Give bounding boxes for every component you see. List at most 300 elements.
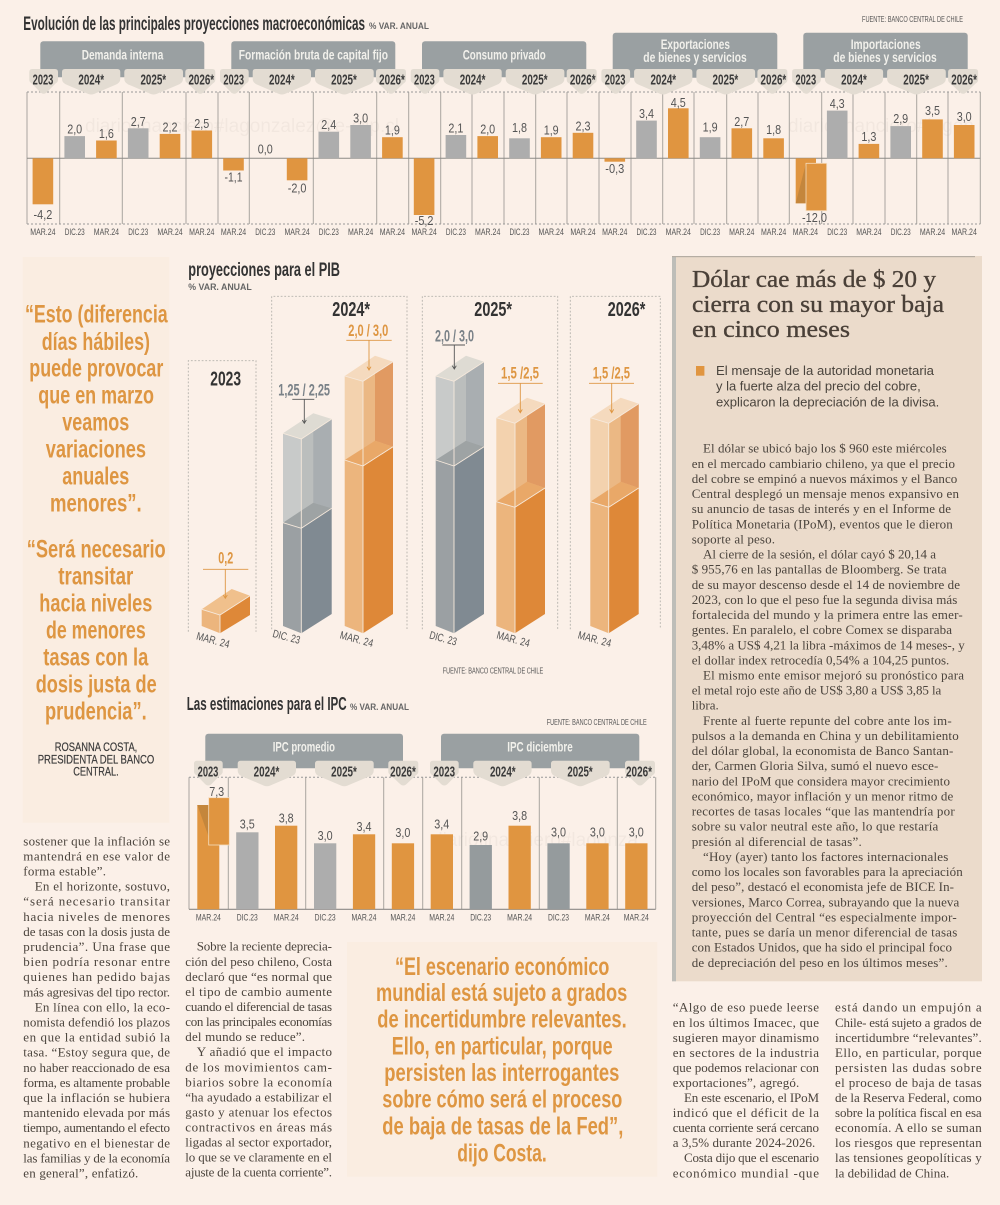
bars: IPC diciembre: 3,0 [551,825,566,840]
text block: fourth column article: incertidumbre “relevantes”. [835,1030,982,1045]
year labels: 2025* [331,765,357,781]
quote: diferencia días hábiles: anuales [62,462,129,490]
header: IPC promedio: IPC promedio [273,738,335,754]
bar: 2026 MAR.24 1,5 / 2,5: MAR. 24 [577,630,612,650]
article body text: del dólar global, la economista de Banco Santan- [692,743,953,758]
bar: 2025 MAR.24 1,5 / 2,5: 1,5 /2,5 [501,363,539,382]
group: Importaciones de bienes y servicios: 2025* [903,72,929,88]
text block: third column article: indicó que el déficit de la [673,1105,819,1120]
quote: diferencia días hábiles: menores”. [50,489,142,517]
group: Consumo privado: MAR.24 [475,227,500,238]
group: Consumo privado: Consumo privado [463,46,546,62]
bar: 2024 DIC.23 1,25 / 2,25: 1,25 / 2,25 [278,380,330,399]
text block: left column article: tiempo, aumentando el efecto [23,1120,170,1135]
group: Formación bruta de capital fijo: 3,0 [353,110,368,126]
chart: GDP 3D bars: 2026* [608,299,645,321]
article body text: sobre su valor neutral este año, lo que restaría [692,819,939,834]
article body text: proyección del Central “es especialmente impor- [692,909,957,924]
heading: macroeconomic projections: % VAR. ANUAL [369,21,429,31]
group: Exportaciones de bienes y servicios: 1,8 [766,122,781,137]
quote: diferencia días hábiles [25,301,168,517]
text block: left column article: las familias y de la economía [23,1150,170,1165]
group: Exportaciones de bienes y servicios: MAR.24 [666,227,691,238]
article body text: der, Carmen Gloria Silva, sumó el nuevo esce- [692,758,938,773]
group: Importaciones de bienes y servicios: MAR.24 [952,227,977,238]
group: Exportaciones de bienes y servicios: 2,7 [734,114,749,129]
text block: left column article: En el horizonte, sostuvo, [35,879,170,894]
bars: IPC diciembre: MAR.24 [429,913,454,924]
text block: left column article: forma estable”. [23,864,106,878]
bar: 2025 DIC.23 2,0 / 3,0: 2,0 / 3,0 [435,326,474,345]
group: Exportaciones de bienes y servicios: MAR.24 [761,227,786,238]
group: Exportaciones de bienes y servicios: de bienes y servicios [643,49,747,65]
article headline: en cinco meses [692,317,850,343]
text block: third column article: En este escenario, el IPoM [684,1090,819,1105]
text block: left column article: hacia niveles de menores [23,909,170,924]
heading: macroeconomic projections: Evolución de las principales proyecciones macroeconómicas [23,14,365,35]
text block: fourth column article: el proceso de baja de tasas [835,1075,982,1090]
group: Exportaciones de bienes y servicios: -0,3 [605,161,624,176]
group: Formación bruta de capital fijo: 2025* [331,72,357,88]
year labels: 2023 [433,765,455,781]
text block: second column article: el tipo de cambio aumente [185,984,332,999]
group: Consumo privado: 2026* [570,72,596,88]
group: Demanda interna: 2,0 [67,122,82,137]
quote: diferencia días hábiles: variaciones [46,435,146,463]
quote: diferencia días hábiles: “Esto (diferencia [25,301,168,329]
article body text: gentes. En paralelo, el cobre Comex se disparaba [692,622,952,637]
group: Consumo privado: DIC.23 [510,227,530,238]
article body text: versiones, Marco Correa, subrayando que la nueva [692,894,960,909]
group: Importaciones de bienes y servicios: DIC.23 [891,227,911,238]
text block: second column article: gasto y atenuar los efectos [185,1104,332,1120]
attribution: Rosanna Costa: ROSANNA COSTA, [55,740,137,754]
group: Formación bruta de capital fijo [220,41,406,238]
text block: third column article: que podemos relacionar con [673,1060,820,1075]
bar: 2023 MAR.24 0,2: 0,2 [218,548,233,567]
article body text: soporte al peso. [692,531,775,546]
article body text: en el mercado cambiario chileno, ya que el precio [692,456,955,471]
quote: será necesario transitar: de menores [46,617,146,645]
bar: 2023 MAR.24 0,2: MAR. 24 [195,631,231,651]
group: Exportaciones de bienes y servicios: DIC.23 [700,227,720,238]
source note: GDP chart: FUENTE: BANCO CENTRAL DE CHILE [443,666,543,675]
group: Importaciones de bienes y servicios: Importaciones [851,36,921,52]
year labels: 2026* [390,765,416,781]
group: Consumo privado: 2,1 [448,120,463,136]
article body text: nario del IPoM que considera mayor crecimiento [692,773,950,788]
group: Exportaciones de bienes y servicios: MAR.24 [729,227,754,238]
bar: 2025 DIC.23 2,0 / 3,0: DIC. 23 [428,630,458,648]
group: Formación bruta de capital fijo: MAR.24 [221,227,246,238]
article body text: libra. [692,698,719,713]
text block: fourth column article [835,1000,982,1180]
group: Consumo privado: MAR.24 [570,227,596,238]
text block: fourth column article: Ello, en particular, porque [835,1045,982,1060]
panel: pull quote escenario económico: de baja de tasas de la Fed”, [382,1112,623,1140]
header: IPC promedio [205,734,403,768]
heading: GDP projections: proyecciones para el PIB [188,260,340,281]
bar: 2025 DIC.23 2,0 / 3,0 [428,326,484,648]
group: Formación bruta de capital fijo: 0,0 [258,141,273,156]
panel: pull quote escenario económico [347,942,657,1177]
year tabs [194,761,655,786]
group: Demanda interna: 2,2 [162,119,178,134]
article headline: Dólar cae más de $ 20 y [692,267,936,293]
group: Demanda interna [29,41,215,238]
article body text: del peso”, destacó el economista jefe de BICE In- [692,879,954,894]
bar: 2024 DIC.23 1,25 / 2,25: DIC. 23 [271,628,301,647]
bars: IPC promedio: DIC.23 [237,913,258,924]
group: Importaciones de bienes y servicios: de bienes y servicios [833,49,937,65]
text block: second column article: contractivos en áreas más [185,1120,332,1134]
quote: será necesario transitar: dosis justa de [36,670,157,698]
group: Importaciones de bienes y servicios: MAR.24 [920,227,945,238]
chart: GDP 3D bars [188,296,660,651]
panel: dollar article [672,256,982,981]
group: Demanda interna: MAR.24 [94,227,119,238]
group: Demanda interna: 2024* [78,72,104,88]
text block: third column article: cuenta corriente será cercano [673,1120,819,1135]
heading: CPI estimates: % VAR. ANUAL [350,702,409,712]
article body text [692,441,965,970]
group: Importaciones de bienes y servicios: 2023 [795,72,816,88]
group: Consumo privado: 1,9 [544,123,559,138]
group: Exportaciones de bienes y servicios: 1,9 [703,120,718,134]
group: Consumo privado: 2024* [460,72,486,88]
bar: 2024 MAR.24 2,0 / 3,0: MAR. 24 [339,630,374,650]
group: Formación bruta de capital fijo: 2024* [269,72,295,88]
text block: second column article: biarios sobre la economía [185,1074,332,1089]
icon: orange bullet [696,366,704,376]
article body text: del cobre se empinó a nuevos máximos y el Banco [692,471,957,486]
bars: IPC promedio: 3,0 [395,825,410,840]
chart: CPI bars [189,734,656,924]
bars: IPC diciembre: 3,4 [434,816,449,831]
panel: pull quote Rosanna Costa [23,257,169,823]
group: Importaciones de bienes y servicios: 2,9 [893,111,908,126]
article body text: con Estados Unidos, que ha sido el principal foco [692,940,952,955]
text block: second column article [185,939,332,1180]
text block: left column article: sostener que la inflación se [23,833,170,848]
text block: fourth column article: los riesgos que representan [835,1135,982,1150]
year labels: 2023 [198,765,218,781]
text block: left column article: prudencia”. Una frase que [23,939,170,954]
article headline: cierra con su mayor baja [692,292,944,318]
text block: left column article [23,833,171,1180]
article body text: pulsos a la demanda en China y un debilitamiento [692,728,959,743]
text block: third column article: sugieren mayor dinamismo [673,1030,819,1045]
article body text: de depreciación del peso en los últimos meses”. [692,955,948,970]
group: Demanda interna: 2,5 [194,116,209,131]
group: Formación bruta de capital fijo: MAR.24 [284,227,310,238]
panel: pull quote escenario económico: sobre cómo será el proceso [382,1086,622,1114]
article body text: Al cierre de la sesión, el dólar cayó $ 20,14 a [703,546,936,562]
bars: IPC diciembre: MAR.24 [585,913,610,924]
article body text: de su mayor descenso desde el 14 de noviembre de [692,577,960,592]
article body text: el metal rojo este año de US$ 3,80 a US$ 3,85 la [692,683,942,698]
group: Demanda interna: -4,2 [34,207,52,222]
panel: pull quote escenario económico: Ello, en particular, porque [392,1032,613,1060]
group: Importaciones de bienes y servicios: MAR.24 [856,227,882,238]
group: Formación bruta de capital fijo: MAR.24 [380,227,405,238]
group: Formación bruta de capital fijo: 2023 [223,72,244,88]
text block: left column article: de tasas con la dosis justa de [23,924,170,939]
group: Consumo privado: 1,8 [512,120,527,135]
article body text: Central desplegó un mensaje menos expansivo en [692,486,960,501]
group: Consumo privado: 2,3 [576,118,590,133]
group: Importaciones de bienes y servicios: 2024* [841,72,867,88]
article body text: El dólar se ubicó bajo los $ 960 este miércoles [703,441,947,456]
quote: será necesario transitar: hacia niveles [39,589,152,617]
group: Formación bruta de capital fijo: -2,0 [288,181,306,196]
text block: left column article: tasa. “Estoy segura que, de [23,1045,170,1060]
group: Exportaciones de bienes y servicios: DIC.23 [636,227,656,238]
text block: left column article: bien podría resonar entre [23,954,170,969]
text block: left column article: negativo en el bienestar de [23,1135,170,1150]
attribution: Rosanna Costa: CENTRAL. [73,764,119,778]
group: Exportaciones de bienes y servicios: 2025* [713,72,738,88]
text block: left column article: en general”, enfatizó. [23,1166,138,1180]
source note: CPI chart: FUENTE: BANCO CENTRAL DE CHILE [547,718,647,727]
quote: será necesario transitar: tasas con la [43,643,149,671]
text block: left column article: En línea con ello, la eco- [35,999,170,1014]
text block: fourth column article: Chile- está sujeto a grados de [835,1015,982,1030]
text block: left column article: nomista defendió los plazos [23,1014,170,1030]
chart: CPI bars: diariofinanciero#lagonza [432,830,638,851]
group: Exportaciones de bienes y servicios: 2023 [605,72,625,88]
bar: 2023 MAR.24 0,2 [195,548,250,651]
article body text: El mismo ente emisor mejoró su pronóstico para [703,668,964,682]
bars: IPC diciembre: DIC.23 [470,913,491,924]
bar: 2024 MAR.24 2,0 / 3,0 [339,321,393,650]
bars: IPC diciembre: DIC.23 [548,913,569,924]
text block: second column article: del mundo se reduce”. [185,1029,305,1044]
chart: GDP 3D bars: 2024* [332,299,370,321]
text block: second column article: Sobre la reciente deprecia- [197,939,332,954]
text block: second column article: “ha ayudado a estabilizar el [185,1089,332,1104]
text block: fourth column article: está dando un empujón a [835,1000,982,1015]
text block: left column article: “será necesario transitar [23,894,171,909]
quote: diferencia días hábiles: que en marzo [38,382,154,410]
bars: IPC diciembre: 3,8 [512,808,527,823]
group: Demanda interna: DIC.23 [128,227,148,238]
article subheading [716,363,939,410]
article body text: el dollar index retrocedía 0,54% a 104,25 puntos. [692,652,949,667]
text block: second column article: ajuste de la cuenta corriente”. [185,1165,332,1180]
group: Demanda interna: 2025* [140,72,166,88]
text block: third column article: en los últimos Imacec, que [673,1015,819,1030]
quote: será necesario transitar [27,535,166,725]
group: Exportaciones de bienes y servicios: MAR.24 [602,227,627,238]
group: Demanda interna: MAR.24 [30,227,56,238]
text block: left column article: mantendrá en ese valor de [23,848,170,863]
group: Exportaciones de bienes y servicios: 4,5 [671,95,686,110]
bars: IPC promedio: 3,4 [356,819,372,834]
bar: 2026 MAR.24 1,5 / 2,5 [577,363,639,650]
text block: second column article: con las principales economías [185,1014,332,1029]
group: Formación bruta de capital fijo: Formación bruta de capital fijo [239,46,388,62]
group: Consumo privado: MAR.24 [539,227,564,238]
article body text: recortes de tasas locales “que las mantendría por [692,804,955,819]
bars: IPC promedio: MAR.24 [390,913,415,924]
bars: IPC diciembre: 3,0 [590,825,605,840]
panel: pull quote escenario económico: dijo Costa. [457,1140,547,1168]
text block: fourth column article: sobre la política fiscal en esa [835,1105,982,1120]
group: Demanda interna: MAR.24 [157,227,183,238]
group: Demanda interna: 1,6 [99,126,114,141]
panel: pull quote escenario económico: mundial está sujeto a grados [376,979,627,1007]
quote: diferencia días hábiles: veamos [62,408,129,436]
text block: third column article: a 3,5% durante 2024-2026. [673,1135,815,1150]
text block: fourth column article: la debilidad de China. [835,1165,949,1180]
group: Importaciones de bienes y servicios: DIC.23 [827,227,847,238]
text block: third column article: “Algo de eso puede leerse [673,1000,819,1015]
article subheading: explicaron la depreciación de la divisa. [716,395,939,410]
text block: second column article: de los movimientos cam- [185,1059,332,1074]
group: Formación bruta de capital fijo: 2026* [379,72,405,88]
chart: macroeconomic projections bars: diariofinanciero#lagon [788,116,974,137]
text block: second column article: Y añadió que el impacto [197,1044,332,1059]
group: Consumo privado [411,41,597,238]
group: Importaciones de bienes y servicios: -12,0 [802,210,827,225]
group: Importaciones de bienes y servicios: MAR.24 [793,227,818,238]
heading: GDP projections [188,260,340,292]
group: Consumo privado: 2023 [414,72,435,88]
bar: 2024 DIC.23 1,25 / 2,25 [271,380,332,647]
bars: IPC diciembre: MAR.24 [507,913,532,924]
article body text: 3,48% a US$ 4,21 la libra -máximos de 14 meses-, y [692,637,965,652]
bars: IPC diciembre: MAR.24 [624,913,649,924]
heading: GDP projections: % VAR. ANUAL [188,282,252,292]
group: Importaciones de bienes y servicios: 2026* [951,72,977,88]
text block: third column article [673,1000,820,1180]
article body text: $ 955,76 en las pantallas de Bloomberg. Se trata [692,562,947,577]
quote: diferencia días hábiles: puede provocar [29,355,163,383]
text block: third column article: en sectores de la industria [673,1045,819,1060]
article body text: presión al diferencial de tasas”. [692,834,862,849]
article body text: tante, pues se daría un menor diferencial de tasas [692,924,957,940]
quote: será necesario transitar: prudencia”. [45,697,147,725]
article subheading: y la fuerte alza del precio del cobre, [716,379,921,394]
group: Importaciones de bienes y servicios: 3,0 [957,109,972,124]
bar: 2025 MAR.24 1,5 / 2,5 [495,363,545,650]
text block: fourth column article: de la Reserva Federal, como [835,1090,982,1105]
group: Demanda interna: 2026* [188,72,214,88]
chart: macroeconomic projections bars [27,33,980,238]
group: Consumo privado: 2025* [522,72,548,88]
quote: será necesario transitar: “Será necesario [27,535,166,563]
panel: pull quote escenario económico: persisten las interrogantes [384,1059,619,1087]
article body text: Política Monetaria (IPoM), eventos que le dieron [692,516,953,531]
group: Consumo privado: -5,2 [415,213,433,228]
group: Formación bruta de capital fijo: 1,9 [385,123,400,138]
article body text: Frente al fuerte repunte del cobre ante los im- [703,713,952,728]
text block: fourth column article: persisten las dudas sobre [835,1060,982,1075]
text block: third column article: económico mundial -que [673,1165,819,1180]
group: Formación bruta de capital fijo: -1,1 [224,170,242,185]
year labels: 2025* [567,765,593,781]
article body text: 2023, con lo que el peso fue la segunda divisa más [692,592,957,607]
text block: second column article: cuando el diferencial de tasas [185,999,332,1014]
text block: second column article: declaró que “es normal que [185,969,332,984]
panel: pull quote escenario económico: de incertidumbre relevantes. [377,1006,627,1034]
bars: IPC diciembre: 2,9 [473,829,488,844]
group: Exportaciones de bienes y servicios: 3,4 [639,106,654,121]
bars: IPC diciembre [429,808,649,924]
bars: IPC promedio: 7,3 [209,784,224,799]
text block: left column article: quienes han pedido bajas [23,969,170,984]
text block: left column article: forma, es altamente probable [23,1075,170,1090]
chart: GDP 3D bars: 2025* [474,299,512,321]
group: Importaciones de bienes y servicios [792,33,978,238]
group: Consumo privado: MAR.24 [411,227,437,238]
heading: CPI estimates: Las estimaciones para el IPC [187,694,347,714]
bars: IPC promedio: MAR.24 [196,913,221,924]
header: IPC diciembre [441,734,639,768]
bar: 2026 MAR.24 1,5 / 2,5: 1,5 /2,5 [593,363,630,382]
text block: second column article: ción del peso chileno, Costa [185,954,332,969]
text block: fourth column article: las tensiones geopolíticas y [835,1150,982,1165]
group: Consumo privado: 2,0 [480,122,495,137]
text block: left column article: no haber reaccionado de esa [23,1060,170,1075]
group: Demanda interna: MAR.24 [189,227,214,238]
article body text: como los locales son favorables para la apreciación [692,864,963,879]
group: Importaciones de bienes y servicios: 1,3 [861,129,876,144]
text block: second column article: ligadas al sector exportador, [185,1135,332,1150]
text block: left column article: más agresivas del tipo rector. [23,984,170,999]
text block: left column article: que la inflación se hubiera [23,1090,170,1105]
panel: pull quote escenario económico: “El escenario económico [395,953,609,981]
article subheading: El mensaje de la autoridad monetaria [716,363,935,378]
attribution: Rosanna Costa [38,740,154,778]
group: Consumo privado: DIC.23 [446,227,466,238]
quote: será necesario transitar: transitar [58,563,133,591]
group: Formación bruta de capital fijo: DIC.23 [255,227,275,238]
group: Exportaciones de bienes y servicios [601,33,787,238]
year labels [198,765,652,781]
attribution: Rosanna Costa: PRESIDENTA DEL BANCO [38,752,154,766]
bars: IPC diciembre: 3,0 [629,825,644,840]
group: Demanda interna: 2023 [33,72,53,88]
bars: IPC promedio: 3,0 [318,828,333,843]
group: Importaciones de bienes y servicios: 4,3 [830,96,845,111]
year labels: 2024* [490,765,516,781]
text block: second column article: lo que se ve claramente en el [185,1150,332,1165]
quote: diferencia días hábiles: días hábiles) [42,328,150,356]
text block: third column article: exportaciones”, agregó. [673,1075,799,1090]
group: Importaciones de bienes y servicios: 3,5 [925,103,940,118]
bar: 2024 MAR.24 2,0 / 3,0: 2,0 / 3,0 [348,321,388,340]
group: Formación bruta de capital fijo: DIC.23 [319,227,339,238]
article body text: su anuncio de tasas de interés y en el Informe de [692,501,951,516]
group: Exportaciones de bienes y servicios: Exportaciones [661,36,730,52]
article headline [692,267,944,343]
year labels: 2024* [254,765,280,781]
chart: GDP 3D bars: 2023 [210,369,241,391]
bars: IPC promedio: 3,8 [279,811,294,826]
chart: macroeconomic projections bars: diariofinanciero#lagonzalez@e-clip.cl [85,116,399,137]
group: Demanda interna: 2,7 [131,114,146,129]
text block: fourth column article: economía. A ello se suman [835,1120,982,1135]
text block: third column article: Costa dijo que el escenario [684,1150,819,1165]
header: IPC diciembre: IPC diciembre [507,738,573,754]
article body text: “Hoy (ayer) tanto los factores internacionales [703,849,948,864]
bars: IPC promedio: MAR.24 [274,913,299,924]
text block: left column article: mantenido elevada por más [23,1105,170,1120]
bars: IPC promedio: MAR.24 [352,913,376,924]
article body text: fortalecida del mundo y la primera entre las emer- [692,607,963,622]
